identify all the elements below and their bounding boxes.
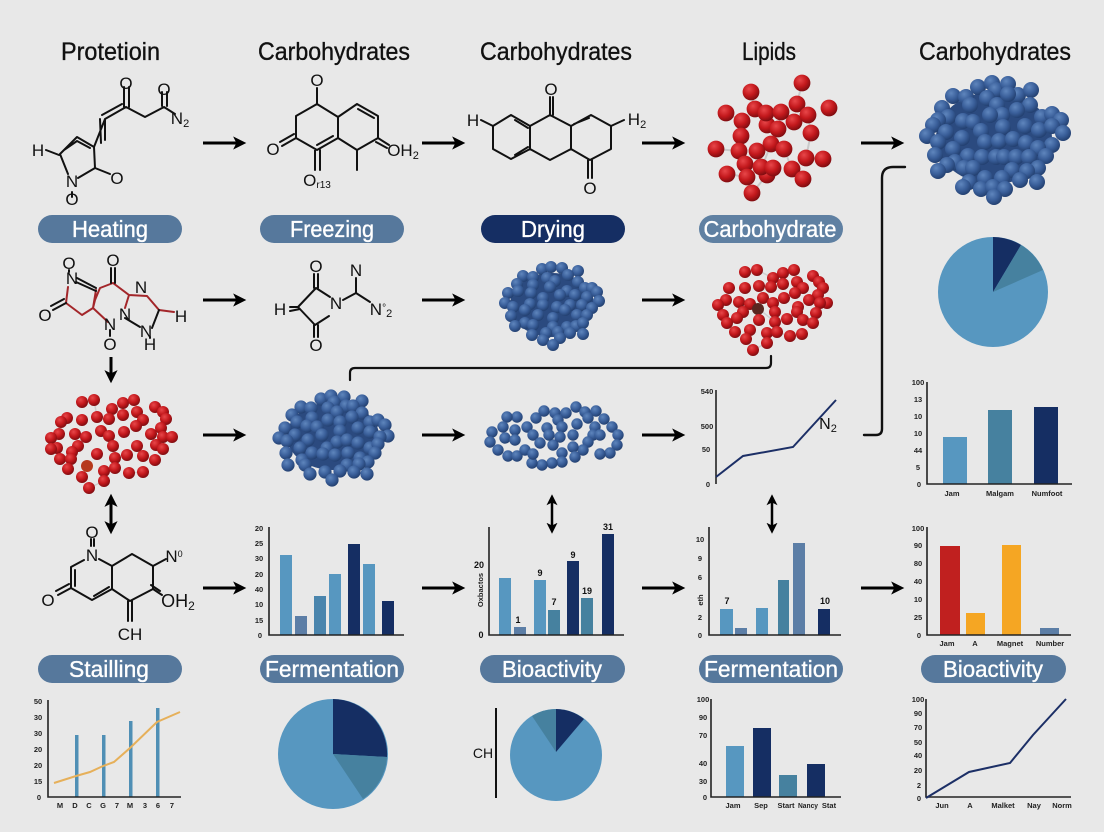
pill: Heating: Heating <box>72 216 148 242</box>
molecule: tricyclic structure: O <box>583 179 597 198</box>
bar chart: row 4 column 3: 31 <box>603 522 613 532</box>
bar chart: bottom column 4: Sep <box>754 801 768 810</box>
pill: Heating <box>38 215 182 243</box>
arrow: double column 3 <box>551 497 553 531</box>
bar chart: row 4 column 4: 10 <box>820 596 830 606</box>
line chart: bottom right: 0 <box>917 794 921 803</box>
molecule: top left structure: O <box>119 74 133 93</box>
bar chart: row 4 column 3 <box>474 522 624 640</box>
pill: Carbohydrate: Carbohydrate <box>704 216 836 242</box>
molecule: five-membered ring row 2 <box>274 257 392 355</box>
line chart: bottom right: Nay <box>1027 801 1042 810</box>
molecule: tricyclic structure: H <box>628 110 640 129</box>
bar chart: row 3 column 5 <box>912 378 1072 498</box>
molecule: tricyclic structure: 2 <box>640 119 646 131</box>
molecule: carbohydrate bicyclic <box>266 71 419 191</box>
combo chart: bottom left: 15 <box>34 777 42 786</box>
bar chart: bottom column 4: Stat <box>822 801 837 810</box>
bar chart: row 3 column 5: Jam <box>944 489 960 498</box>
bar chart: row 4 column 4: 0 <box>698 631 702 640</box>
bar chart: row 4 column 4: 10 <box>696 535 704 544</box>
pill: Bioactivity column 5 <box>921 655 1066 683</box>
bar chart: row 4 column 5: Magnet <box>997 639 1024 648</box>
bar chart: row 4 column 2 <box>255 524 404 640</box>
line chart: bottom right: 100 <box>912 695 924 704</box>
label and divider: CH: CH <box>473 745 493 761</box>
molecule: bottom-left structure <box>41 523 195 644</box>
title: Carbohydrates column 5: Carbohydrates <box>919 38 1071 66</box>
bar chart: row 4 column 5: 100 <box>912 524 924 533</box>
molecule: five-membered ring row 2: O <box>309 257 323 276</box>
bar chart: bottom column 4: Jam <box>725 801 741 810</box>
line chart: row 3 column 4: 500 <box>701 422 713 431</box>
molecule: bottom-left structure: N <box>86 546 98 565</box>
line chart: row 3 column 4: 2 <box>831 423 837 435</box>
molecule: red-bonded structure row 2 <box>38 251 187 354</box>
line chart: row 3 column 4: N <box>819 416 831 433</box>
combo chart: bottom left: D <box>72 801 78 810</box>
arrow <box>203 142 243 144</box>
molecule: red cluster row 2 <box>712 264 833 356</box>
bar chart: row 4 column 2: 30 <box>255 554 263 563</box>
bar chart: row 4 column 3: 9 <box>537 568 543 578</box>
bar chart: row 3 column 5: 100 <box>912 378 924 387</box>
molecule: tricyclic structure: O <box>544 80 558 99</box>
molecule: red-bonded structure row 2: O <box>38 306 52 325</box>
molecule: carbohydrate bicyclic: OH <box>387 141 413 160</box>
line chart: bottom right: 90 <box>914 709 922 718</box>
molecule: five-membered ring row 2: ° <box>382 303 386 314</box>
pill: Fermentation column 4: Fermentation <box>704 656 838 682</box>
combo chart: bottom left: 0 <box>37 793 41 802</box>
molecule: carbohydrate bicyclic: O <box>310 71 324 90</box>
line chart: bottom right: A <box>967 801 973 810</box>
molecule: blue ring chain <box>484 401 624 471</box>
bar chart: row 4 column 5 <box>912 524 1071 648</box>
arrow <box>422 298 462 302</box>
bar chart: bottom column 4: Start <box>777 801 795 810</box>
bar chart: row 4 column 3: 20 <box>474 560 484 570</box>
combo chart: bottom left: 6 <box>156 801 160 810</box>
connector line between rows <box>350 356 771 380</box>
molecule: red-bonded structure row 2: N <box>140 322 152 341</box>
bar chart: row 4 column 2: 10 <box>255 600 263 609</box>
molecule: blue cluster row 2 <box>499 261 605 351</box>
line chart: row 3 column 4 <box>701 387 837 489</box>
bar chart: bottom column 4: Nancy <box>798 801 819 810</box>
molecule: red-bonded structure row 2: N <box>104 315 116 334</box>
arrow <box>861 586 901 590</box>
combo chart: bottom left: 30 <box>34 713 42 722</box>
pie chart: top right <box>938 237 1048 347</box>
bar chart: row 3 column 5: 5 <box>916 463 920 472</box>
molecule: five-membered ring row 2: N <box>330 294 342 313</box>
bar chart: row 4 column 5: 40 <box>914 577 922 586</box>
molecule: bottom-left structure: N <box>165 547 178 566</box>
combo chart: bottom left: 20 <box>34 761 42 770</box>
bar chart: row 4 column 4: 2 <box>698 613 702 622</box>
molecule: bottom-left structure: CH <box>118 625 142 644</box>
bar chart: row 4 column 5: 90 <box>914 541 922 550</box>
bar chart: row 4 column 3: 1 <box>515 615 521 625</box>
molecule: top left structure: O <box>157 80 171 99</box>
molecule: red-bonded structure row 2: O <box>103 335 117 354</box>
title: Carbohydrates column 2: Carbohydrates <box>258 38 410 66</box>
bar chart: row 4 column 3: Oxbactos <box>476 573 485 607</box>
molecule: red-bonded structure row 2: O <box>62 254 76 273</box>
connector arrow to top-right cluster <box>864 167 905 435</box>
line chart: bottom right <box>912 695 1072 810</box>
bar chart: row 4 column 5: 0 <box>917 631 921 640</box>
label and divider: CH <box>473 708 496 798</box>
bar chart: row 4 column 3: 7 <box>551 597 557 607</box>
title: Lipids: Lipids <box>742 38 796 66</box>
bar chart: row 3 column 5: 44 <box>914 446 923 455</box>
molecule: carbohydrate bicyclic: r13 <box>316 180 331 191</box>
molecule: carbohydrate bicyclic: 2 <box>413 150 419 162</box>
bar chart: row 4 column 5: 80 <box>914 559 922 568</box>
bar chart: row 4 column 2: 20 <box>255 524 263 533</box>
arrow <box>203 586 243 590</box>
molecule: red cluster row 3 <box>45 394 178 494</box>
bar chart: row 4 column 4: 9 <box>698 554 702 563</box>
molecule: blue cluster row 3 <box>272 389 395 487</box>
molecule: top left structure: O <box>110 169 124 188</box>
line chart: row 3 column 4: 540 <box>701 387 713 396</box>
line chart: bottom right: 70 <box>914 723 922 732</box>
molecule: five-membered ring row 2: 2 <box>386 308 392 320</box>
line chart: row 3 column 4: 50 <box>702 445 710 454</box>
molecule: red-bonded structure row 2: N <box>119 305 131 324</box>
bar chart: row 4 column 3: 0 <box>478 630 484 640</box>
bar chart: bottom column 4: 100 <box>697 695 709 704</box>
bar chart: row 3 column 5: 0 <box>917 480 921 489</box>
molecule: top left structure: N <box>171 109 183 128</box>
pill: Bioactivity column 5: Bioactivity <box>943 656 1043 682</box>
bar chart: row 4 column 5: Jam <box>939 639 955 648</box>
molecule: red lipid cluster top <box>708 75 837 201</box>
bar chart: row 4 column 5: 25 <box>914 613 922 622</box>
combo chart: bottom left: C <box>86 801 92 810</box>
bar chart: row 3 column 5: 13 <box>914 395 922 404</box>
arrow <box>422 586 462 590</box>
bar chart: row 4 column 3: 9 <box>570 550 576 560</box>
molecule: blue cluster top right <box>919 75 1071 205</box>
title: Carbohydrates column 3: Carbohydrates <box>480 38 632 66</box>
molecule: red-bonded structure row 2: H <box>144 335 156 354</box>
pill: Fermentation column 2: Fermentation <box>265 656 399 682</box>
molecule: carbohydrate bicyclic: O <box>303 171 316 190</box>
pill: Bioactivity column 3 <box>480 655 625 683</box>
pill: Drying: Drying <box>521 216 585 242</box>
pill: Freezing <box>260 215 404 243</box>
bar chart: bottom column 4: 30 <box>699 777 707 786</box>
molecule: bottom-left structure: O <box>41 591 55 610</box>
bar chart: row 4 column 3: 19 <box>582 586 592 596</box>
line chart: bottom right: 20 <box>914 766 922 775</box>
combo chart: bottom left: 7 <box>170 801 174 810</box>
molecule: red-bonded structure row 2: O <box>106 251 120 270</box>
bar chart: row 4 column 5: Number <box>1036 639 1064 648</box>
arrow: double column 4 <box>771 497 773 531</box>
molecule: top left structure: 2 <box>183 118 189 130</box>
bar chart: row 4 column 2: 20 <box>255 570 263 579</box>
pill: Stailling: Stailling <box>69 656 149 682</box>
arrow <box>861 142 901 144</box>
arrow <box>642 586 682 590</box>
bar chart: row 4 column 5: 10 <box>914 595 922 604</box>
molecule: top left structure: H <box>32 141 44 160</box>
line chart: bottom right: Malket <box>991 801 1015 810</box>
line chart: row 3 column 4: 0 <box>706 480 710 489</box>
molecule: red-bonded structure row 2: H <box>175 307 187 326</box>
bar chart: row 3 column 5: 10 <box>914 412 922 421</box>
combo chart: bottom left: 50 <box>34 697 42 706</box>
arrow <box>642 298 682 302</box>
combo chart: bottom left: M <box>127 801 133 810</box>
line chart: bottom right: 50 <box>914 738 922 747</box>
bar chart: bottom column 4: 70 <box>699 731 707 740</box>
molecule: bottom-left structure: O <box>85 523 99 542</box>
molecule: five-membered ring row 2: H <box>274 300 286 319</box>
bar chart: bottom column 4: 40 <box>699 759 707 768</box>
molecule: top left structure: O <box>65 190 79 209</box>
molecule: top left structure <box>32 74 189 209</box>
molecule: top left structure: N <box>66 172 78 191</box>
bar chart: row 3 column 5: 10 <box>914 429 922 438</box>
bar chart: row 4 column 4: eth <box>696 594 705 606</box>
molecule: bottom-left structure: 2 <box>188 599 195 613</box>
combo chart: bottom left: G <box>100 801 106 810</box>
arrow: double column 1 <box>110 497 112 531</box>
bar chart: bottom column 4: 0 <box>703 793 707 802</box>
pill: Stailling <box>38 655 182 683</box>
molecule: red-bonded structure row 2: N <box>135 278 147 297</box>
title: Protetioin: Protetioin <box>61 38 160 66</box>
molecule: bottom-left structure: 0 <box>178 549 183 559</box>
combo chart: bottom left <box>34 697 181 810</box>
pill: Drying <box>481 215 625 243</box>
molecule: tricyclic structure <box>467 80 646 198</box>
combo chart: bottom left: 20 <box>34 745 42 754</box>
bar chart: row 3 column 5: Numfoot <box>1032 489 1063 498</box>
combo chart: bottom left: M <box>57 801 63 810</box>
arrow <box>422 142 462 144</box>
molecule: bottom-left structure: OH <box>161 591 188 611</box>
arrow <box>203 298 243 302</box>
bar chart: row 4 column 4: 7 <box>724 596 730 606</box>
bar chart: row 4 column 2: 40 <box>255 585 263 594</box>
bar chart: row 4 column 2: 25 <box>255 539 263 548</box>
combo chart: bottom left: 30 <box>34 729 42 738</box>
molecule: red-bonded structure row 2: N <box>66 269 78 288</box>
arrow <box>642 142 682 144</box>
molecule: five-membered ring row 2: O <box>309 336 323 355</box>
pie chart: bottom column 2 <box>278 699 388 809</box>
molecule: five-membered ring row 2: N <box>370 300 382 319</box>
bar chart: bottom column 4: 90 <box>699 713 707 722</box>
arrow <box>422 434 462 436</box>
bar chart: bottom column 4 <box>697 695 841 810</box>
line chart: bottom right: Jun <box>935 801 949 810</box>
line chart: bottom right: 40 <box>914 751 922 760</box>
line chart: bottom right: Norm <box>1052 801 1072 810</box>
arrow: down column 1 <box>110 357 112 380</box>
arrow <box>642 434 682 436</box>
molecule: five-membered ring row 2: N <box>350 261 362 280</box>
combo chart: bottom left: 7 <box>115 801 119 810</box>
combo chart: bottom left: 3 <box>143 801 147 810</box>
bar chart: row 3 column 5: Malgam <box>986 489 1014 498</box>
molecule: carbohydrate bicyclic: O <box>266 140 280 159</box>
bar chart: row 4 column 4 <box>696 527 841 640</box>
bar chart: row 4 column 2: 0 <box>258 631 262 640</box>
molecule: tricyclic structure: H <box>467 111 479 130</box>
arrow <box>203 434 243 436</box>
pill: Bioactivity column 3: Bioactivity <box>502 656 602 682</box>
pill: Freezing: Freezing <box>290 216 374 242</box>
line chart: bottom right: 2 <box>917 781 921 790</box>
bar chart: row 4 column 4: 6 <box>698 573 702 582</box>
bar chart: row 4 column 2: 15 <box>255 616 263 625</box>
pie chart: bottom column 3 <box>510 709 602 801</box>
bar chart: row 4 column 5: A <box>972 639 978 648</box>
